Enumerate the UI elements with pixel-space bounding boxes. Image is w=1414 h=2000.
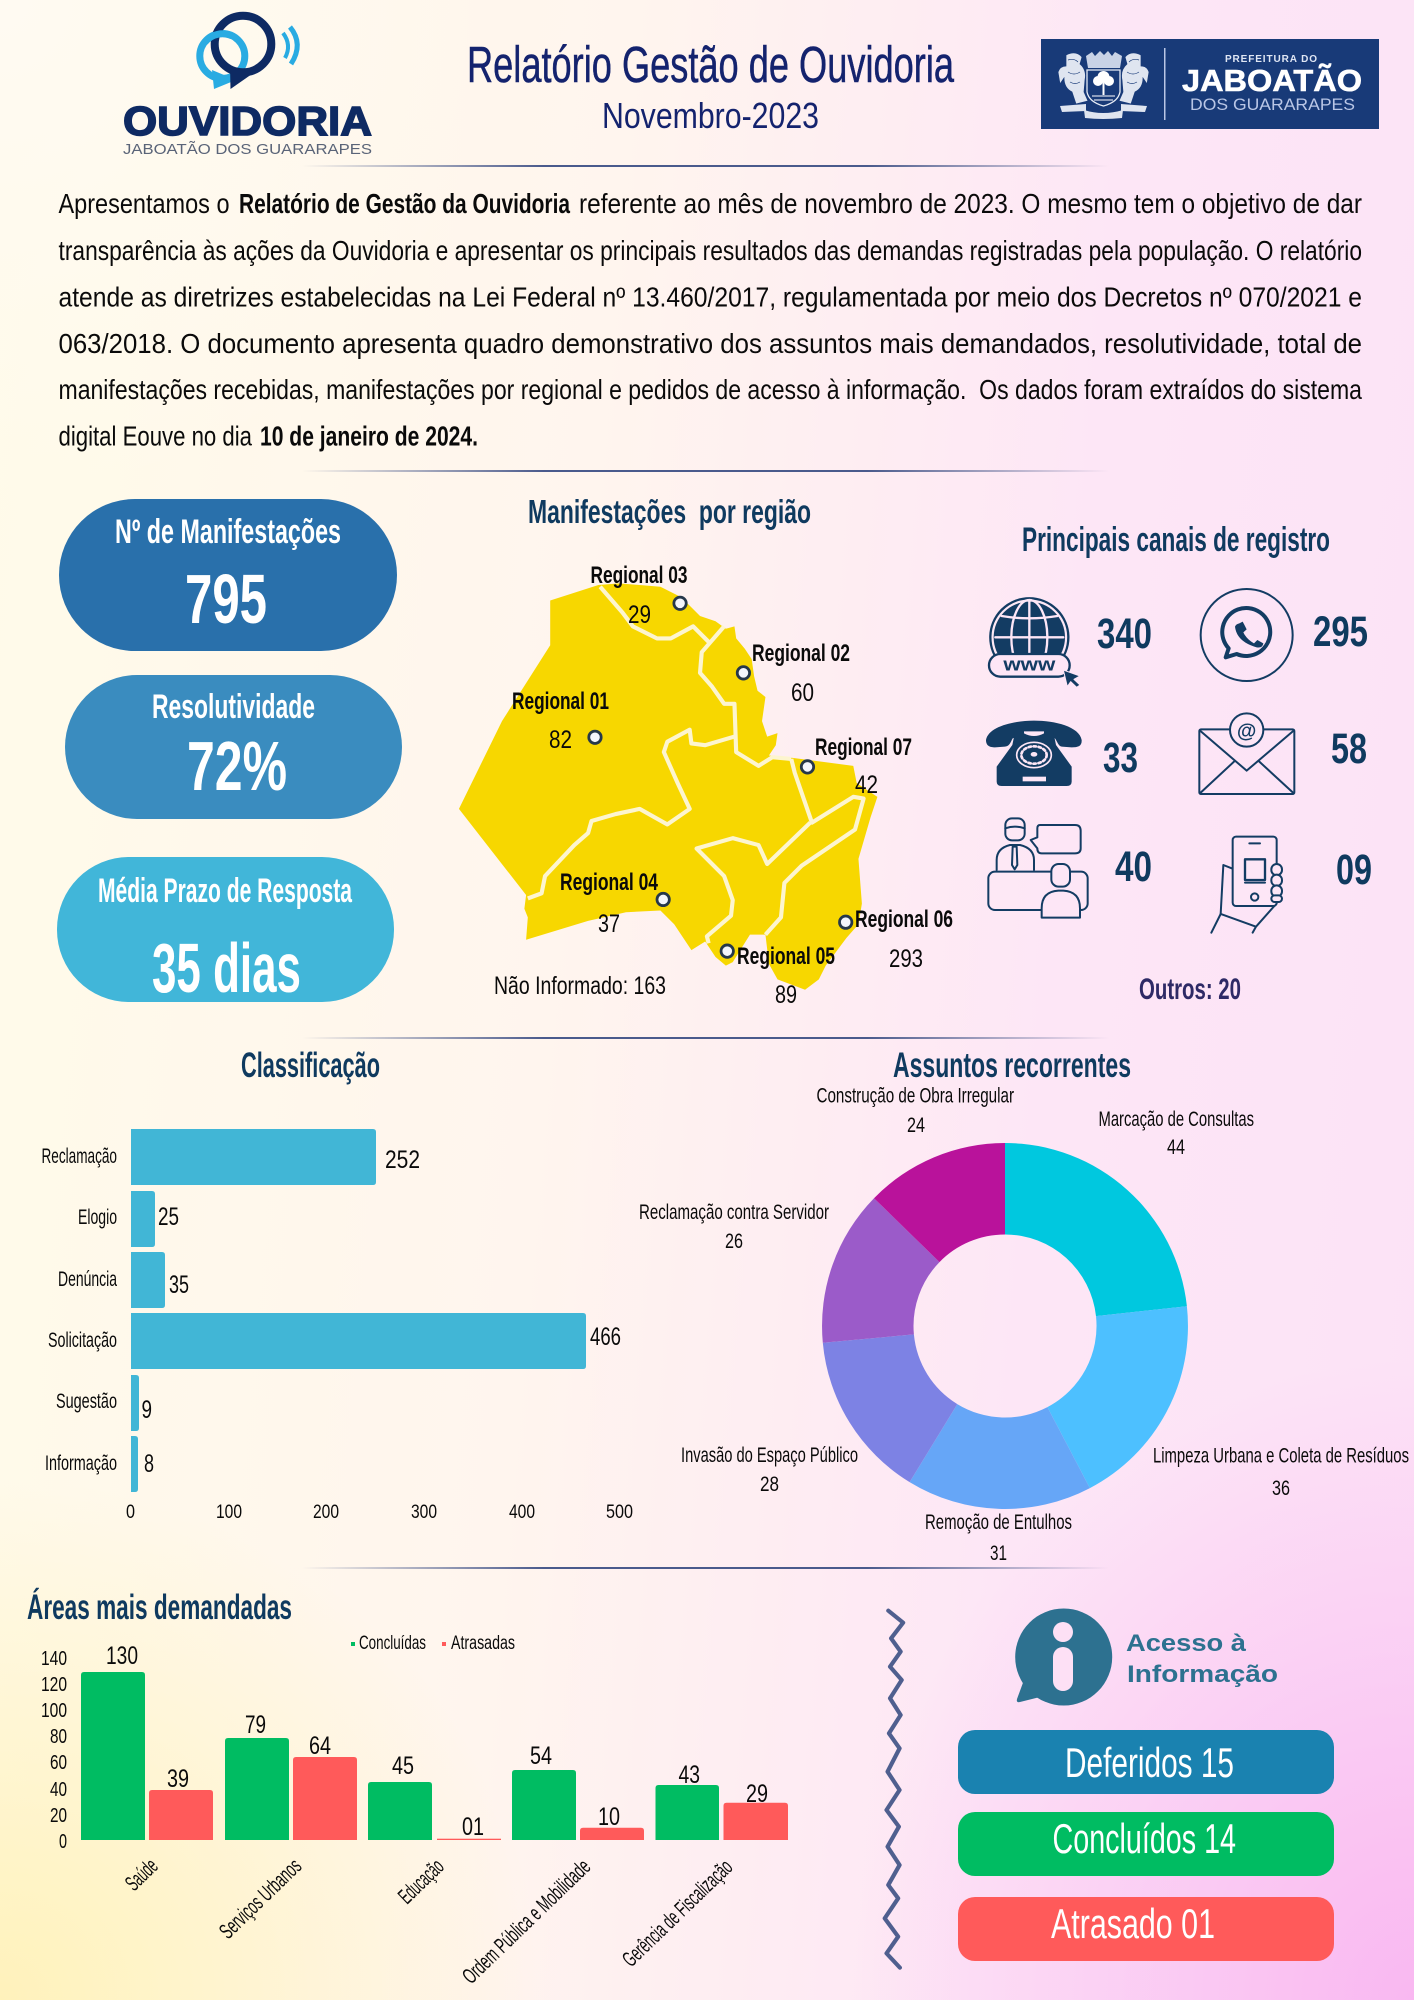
channel numbers: 40: [1115, 843, 1152, 891]
map labels: Regional 03: [590, 562, 688, 589]
heading: acesso à informação: Acesso à: [1126, 1630, 1247, 1657]
stat pill: resolutividade: [65, 675, 402, 819]
bar chart: classificação: 0: [126, 1502, 135, 1523]
channel numbers: 33: [1103, 734, 1138, 782]
pill: atrasado: [958, 1897, 1334, 1961]
channel numbers: 295: [1313, 608, 1368, 656]
donut labels: 36: [1272, 1477, 1290, 1500]
bar chart: classificação: [42, 1129, 633, 1523]
map labels: 29: [628, 601, 651, 629]
chart legend: Atrasadas: [451, 1633, 515, 1654]
y axis: 100: [41, 1700, 67, 1722]
pill: concluídos: Concluídos 14: [1052, 1815, 1236, 1862]
intro text block: 063/2018. O documento apresenta quadro demonstrativo dos assuntos mais demandados, resolutividade, total de: [58, 328, 1362, 359]
bars: atrasadas: [149, 1757, 788, 1840]
donut labels: 26: [725, 1230, 743, 1253]
stat pill: prazo de resposta: 35 dias: [152, 929, 301, 1007]
bar values: 54: [530, 1742, 552, 1770]
icon: in-person service: [988, 818, 1088, 918]
heading: assuntos recorrentes: Assuntos recorrentes: [893, 1046, 1131, 1085]
map labels: 37: [598, 910, 620, 938]
icon: telephone: [986, 721, 1082, 786]
pill: concluídos: [958, 1812, 1334, 1876]
y axis: 80: [50, 1726, 67, 1748]
stat pill: manifestações: [59, 499, 397, 651]
subtitle: Novembro-2023: [602, 95, 819, 136]
bar chart: classificação: Denúncia: [58, 1268, 117, 1291]
bar chart: classificação: 466: [590, 1323, 621, 1351]
icon: envelope: @: [1237, 720, 1256, 742]
intro text block: Relatório de Gestão da Ouvidoria: [239, 188, 571, 219]
chart legend: Concluídas: [359, 1633, 426, 1654]
donut labels: [639, 1084, 1409, 1565]
category labels: [120, 1853, 737, 1989]
donut labels: Construção de Obra Irregular: [816, 1084, 1014, 1108]
y axis: 120: [41, 1674, 67, 1696]
logo: Prefeitura do Jaboatão: [1041, 39, 1379, 129]
chart legend: [351, 1633, 515, 1654]
icon: information bubble: [1015, 1608, 1112, 1706]
category labels: Gerência de Fiscalização: [617, 1854, 737, 1972]
category labels: Saúde: [120, 1853, 163, 1896]
map labels: [494, 562, 953, 1009]
logo text: Jaboatão: JABOATÃO: [1182, 63, 1362, 98]
bar values: 43: [678, 1761, 700, 1789]
channel numbers: 58: [1331, 725, 1367, 773]
y axis: 60: [50, 1752, 67, 1774]
bar chart: classificação: Elogio: [78, 1206, 117, 1229]
title: Relatório Gestão de Ouvidoria: [467, 36, 954, 93]
crest lion: left: [1058, 53, 1088, 104]
bar chart: classificação: 200: [313, 1502, 339, 1523]
map of regions: [459, 583, 877, 990]
bar chart: classificação: Sugestão: [56, 1390, 117, 1413]
icon: website: www: [1002, 654, 1056, 675]
channel numbers: [1097, 608, 1372, 894]
logo: Ouvidoria: [123, 16, 372, 158]
y axis: 20: [50, 1805, 67, 1827]
bar chart: classificação: Reclamação: [42, 1145, 117, 1168]
crest lion: right: [1119, 53, 1149, 104]
map labels: Regional 05: [737, 943, 835, 970]
bar values: 29: [746, 1780, 768, 1808]
intro text block: [58, 188, 1363, 452]
bar values: 130: [106, 1642, 138, 1670]
bar chart: classificação: 35: [169, 1271, 189, 1299]
channel numbers: 340: [1097, 610, 1152, 658]
bars: concluídas: [81, 1672, 719, 1840]
bar values: 10: [598, 1803, 620, 1831]
bar chart: classificação: 300: [411, 1502, 437, 1523]
y axis: [41, 1648, 67, 1853]
map labels: 293: [889, 945, 923, 973]
map labels: Regional 04: [560, 869, 658, 896]
intro text block: digital Eouve no dia: [58, 420, 253, 452]
bar chart: classificação: 8: [144, 1450, 154, 1478]
donut chart: assuntos recorrentes: [822, 1143, 1188, 1509]
stat pill: resolutividade: Resolutividade: [152, 688, 315, 726]
logo subtitle: JABOATÃO DOS GUARARAPES: [123, 141, 372, 158]
bar chart: classificação: Solicitação: [48, 1329, 117, 1352]
heading: classificação: Classificação: [241, 1046, 380, 1085]
map labels: Regional 06: [855, 906, 953, 933]
heading: acesso à informação: [1126, 1630, 1278, 1688]
pill: deferidos: [958, 1730, 1334, 1794]
bar values: 64: [309, 1732, 331, 1760]
intro text block: 10 de janeiro de 2024.: [260, 420, 478, 452]
category labels: Serviços Urbanos: [214, 1853, 306, 1944]
squiggle separator: [885, 1611, 903, 1968]
bar values: [106, 1642, 768, 1841]
heading: áreas mais demandadas: Áreas mais demandadas: [27, 1587, 292, 1627]
stat pill: manifestações: Nº de Manifestações: [115, 513, 341, 551]
donut labels: 44: [1167, 1136, 1185, 1159]
bar values: 39: [167, 1765, 189, 1793]
map labels: Não Informado: 163: [494, 972, 666, 1000]
stat pill: resolutividade: 72%: [187, 727, 287, 805]
stat pill: prazo de resposta: Média Prazo de Resposta: [98, 872, 353, 910]
map labels: 42: [855, 771, 878, 799]
channel icons: [986, 589, 1294, 933]
y axis: 40: [50, 1779, 67, 1801]
stat pill: prazo de resposta: [57, 857, 394, 1007]
logo text: prefeitura do: PREFEITURA DO: [1225, 54, 1317, 65]
donut labels: Invasão do Espaço Público: [681, 1444, 858, 1467]
map labels: Regional 02: [752, 640, 850, 667]
bar values: 79: [245, 1711, 266, 1739]
bar values: 01: [462, 1813, 484, 1841]
icon: website: [989, 598, 1080, 687]
bar chart: classificação: 252: [385, 1146, 420, 1174]
channel numbers: 09: [1336, 846, 1372, 894]
bar chart: classificação: 9: [142, 1396, 152, 1424]
intro text block: Apresentamos o: [58, 188, 230, 219]
icon: envelope: [1199, 713, 1294, 794]
bar chart: classificação: 100: [216, 1502, 242, 1523]
pill: deferidos: Deferidos 15: [1065, 1739, 1234, 1786]
heading: manifestações por região: Manifestações por região: [528, 493, 811, 530]
category labels: Educação: [393, 1854, 449, 1909]
logo text: dos Guararapes: DOS GUARARAPES: [1190, 95, 1355, 114]
bar chart: classificação: 400: [509, 1502, 535, 1523]
donut labels: 28: [760, 1473, 779, 1496]
icon: speech bubbles: [200, 16, 297, 89]
stat pill: manifestações: 795: [185, 560, 267, 638]
donut labels: Remoção de Entulhos: [925, 1511, 1072, 1534]
map labels: 82: [549, 726, 572, 754]
map labels: Regional 01: [512, 688, 609, 715]
bar values: 45: [392, 1752, 414, 1780]
logo wordmark: OUVIDORIA: [123, 98, 372, 144]
donut labels: Reclamação contra Servidor: [639, 1201, 829, 1224]
donut labels: 24: [907, 1114, 925, 1137]
icon: whatsapp: [1201, 589, 1293, 681]
bar chart: classificação: 500: [606, 1502, 633, 1523]
donut labels: Marcação de Consultas: [1098, 1108, 1254, 1131]
grouped bar chart: áreas mais demandadas: [41, 1633, 788, 1989]
y axis: 0: [59, 1831, 67, 1853]
bar chart: classificação: Informação: [45, 1452, 117, 1475]
map labels: Regional 07: [815, 734, 912, 761]
bar chart: classificação: 25: [158, 1203, 179, 1231]
icon: municipal crest: [1058, 51, 1149, 119]
icon: mobile app: [1211, 837, 1282, 933]
map labels: 89: [775, 981, 797, 1009]
pill: atrasado: Atrasado 01: [1051, 1900, 1215, 1947]
map labels: 60: [791, 679, 814, 707]
heading: acesso à informação: Informação: [1127, 1661, 1278, 1688]
donut labels: 31: [990, 1542, 1007, 1565]
y axis: 140: [41, 1648, 67, 1670]
channel: outros: Outros: 20: [1139, 973, 1241, 1006]
category labels: Ordem Pública e Mobilidade: [457, 1854, 595, 1989]
